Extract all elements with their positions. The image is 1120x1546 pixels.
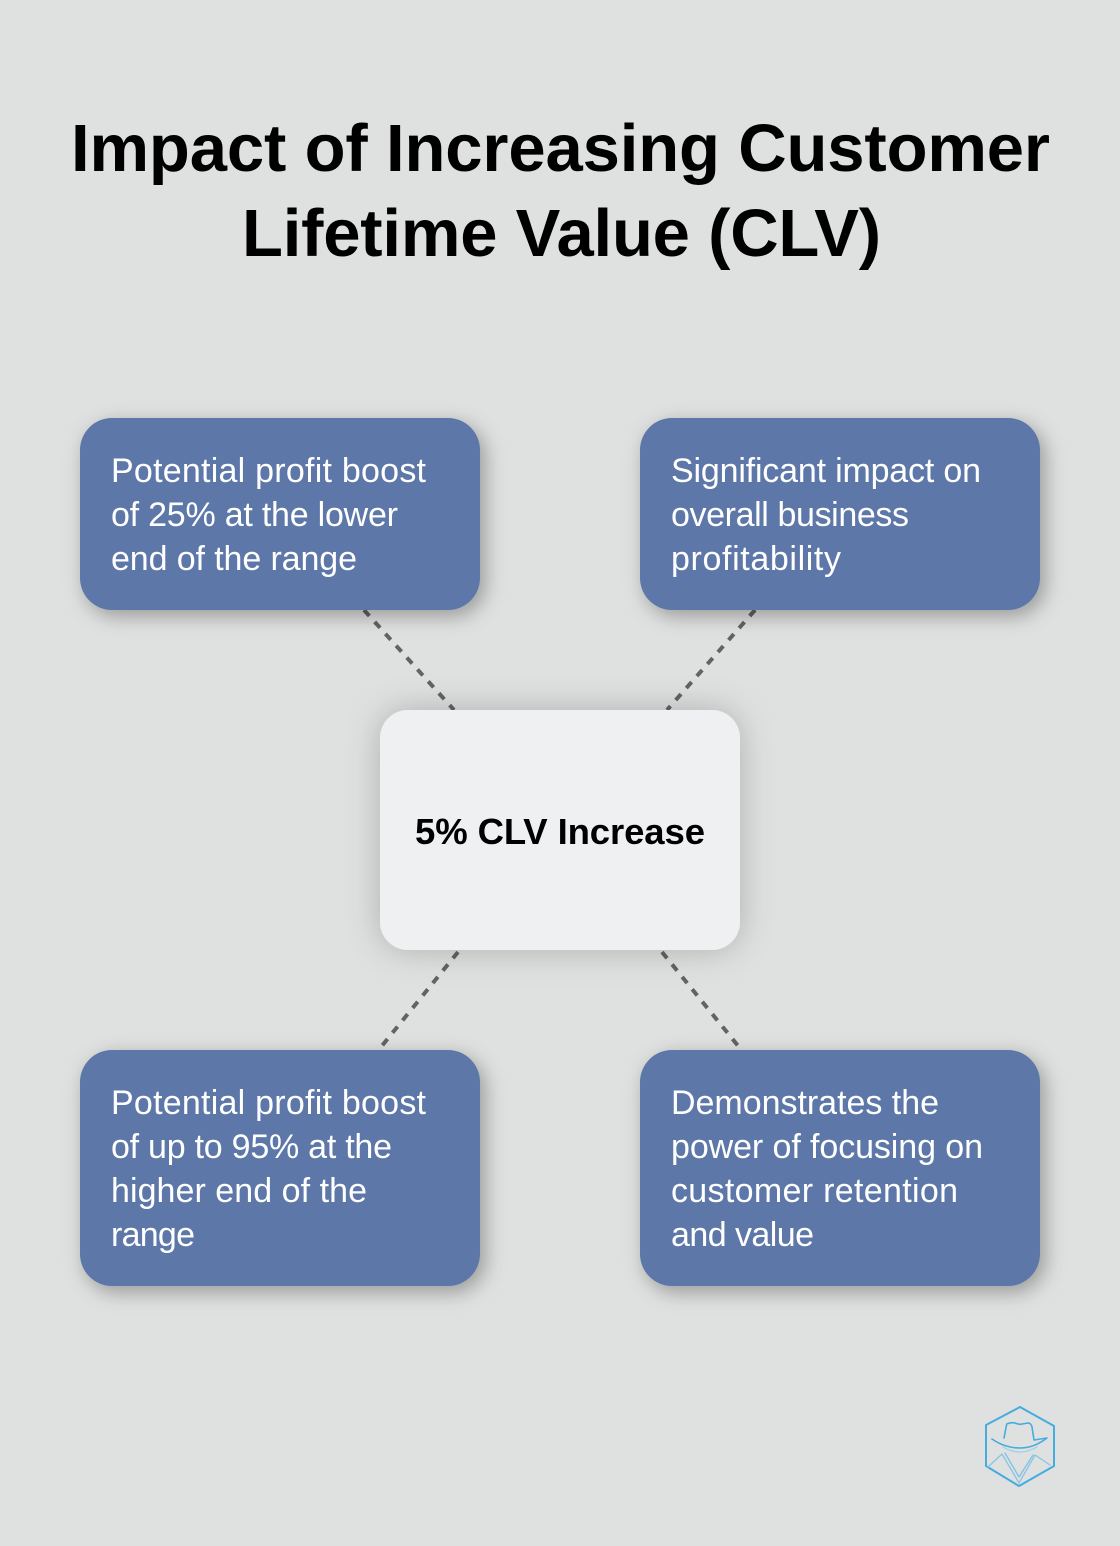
panel: top left bbox=[80, 418, 480, 610]
panel: top left: end of the range bbox=[111, 540, 357, 578]
panel: top right: overall business bbox=[671, 496, 909, 534]
connector: bottom left bbox=[381, 952, 458, 1047]
icon: logo hexagon with hat bbox=[986, 1407, 1054, 1486]
title: Impact of Increasing Customer bbox=[71, 111, 1050, 186]
panel: bottom right bbox=[640, 1050, 1040, 1286]
connector: top left bbox=[364, 610, 454, 710]
panel: top left: Potential profit boost bbox=[111, 452, 427, 490]
title bbox=[71, 111, 1050, 271]
title: Lifetime Value (CLV) bbox=[242, 196, 881, 271]
panel: bottom right: power of focusing on bbox=[671, 1128, 983, 1166]
panel: bottom right: and value bbox=[671, 1216, 814, 1254]
panel: bottom right: Demonstrates the bbox=[671, 1084, 939, 1122]
panel: bottom left bbox=[80, 1050, 480, 1286]
panel: bottom left: Potential profit boost bbox=[111, 1084, 427, 1122]
panel: bottom right: customer retention bbox=[671, 1172, 958, 1210]
panel: top left: of 25% at the lower bbox=[111, 496, 398, 534]
panel: bottom left: of up to 95% at the bbox=[111, 1128, 392, 1166]
panel: center: 5% CLV Increase bbox=[415, 811, 705, 852]
panel: bottom left: higher end of the bbox=[111, 1172, 367, 1210]
connector: bottom right bbox=[662, 952, 739, 1047]
connector: top right bbox=[667, 610, 755, 710]
panel: top right bbox=[640, 418, 1040, 610]
panel: bottom left: range bbox=[111, 1216, 195, 1254]
panel: center bbox=[380, 710, 740, 950]
panel: top right: profitability bbox=[671, 540, 841, 578]
panel: top right: Significant impact on bbox=[671, 452, 981, 490]
